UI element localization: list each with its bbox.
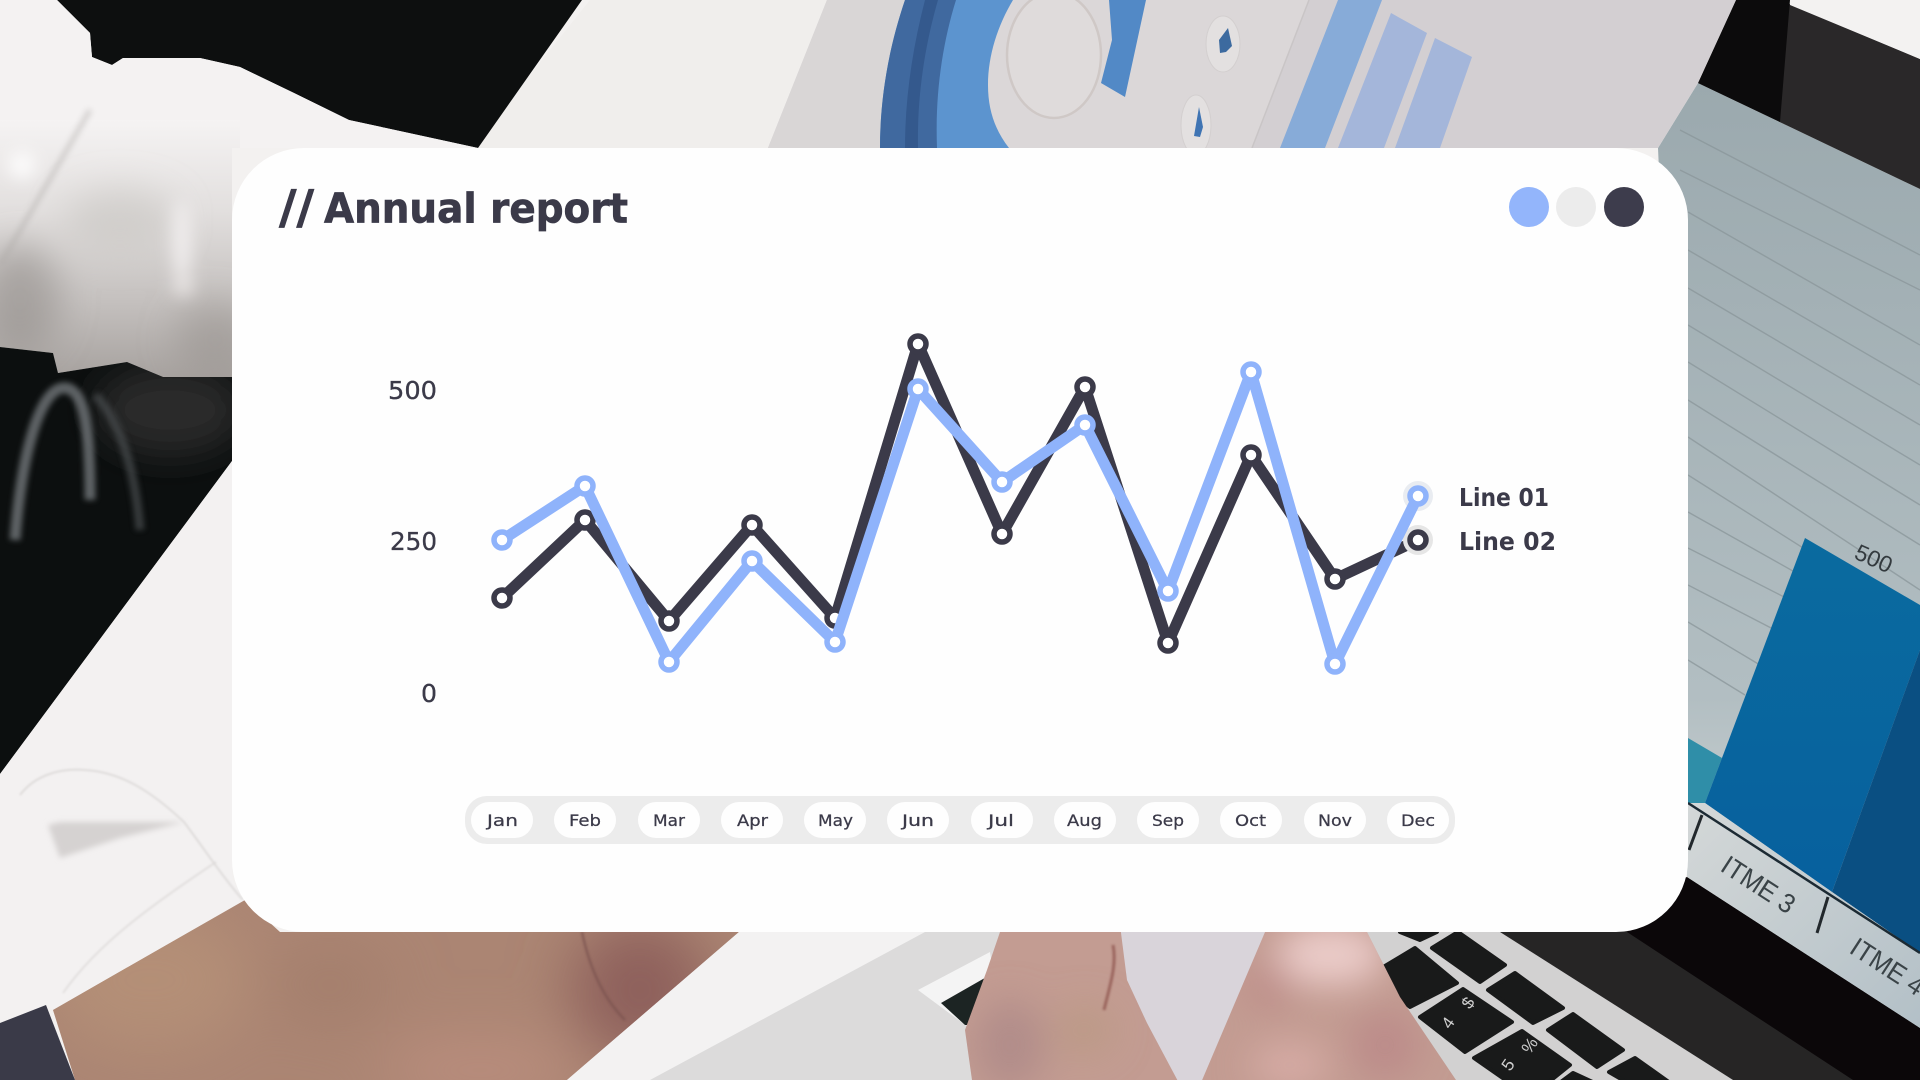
month axis track: Apr xyxy=(737,811,768,830)
month axis track: Jan xyxy=(486,811,518,830)
month axis track: Mar xyxy=(653,811,685,830)
photo: laptop keyboard deck xyxy=(1340,932,1733,1080)
month axis track: Dec xyxy=(1401,811,1435,830)
month axis track: May xyxy=(818,811,853,830)
photo: report bars xyxy=(1280,0,1472,148)
photo: screen bar chart xyxy=(1688,538,1920,953)
photo: right hand holding paper xyxy=(950,925,1470,1080)
month axis track: Sep xyxy=(1152,811,1184,830)
legend: line labels: Line 01 xyxy=(1459,483,1549,512)
photo: white desk top xyxy=(470,0,840,150)
photo: report icons xyxy=(1181,0,1309,155)
month axis track: Nov xyxy=(1318,811,1352,830)
legend: line labels: Line 02 xyxy=(1459,527,1556,556)
photo: keyboard keys xyxy=(1370,932,1680,1080)
y axis labels: 250 xyxy=(390,527,437,556)
photo: key labels: 4 xyxy=(1438,1014,1459,1032)
y axis labels: 500 xyxy=(388,376,437,405)
month axis track: Aug xyxy=(1067,811,1102,830)
photo: key labels: % xyxy=(1518,1034,1542,1057)
window dots xyxy=(1509,187,1644,227)
title: // xyxy=(279,180,314,234)
month axis track: Jun xyxy=(901,811,934,830)
photo: laptop dark hinge xyxy=(1500,877,1920,1080)
photo: screen label strip: ITME 3 xyxy=(1716,850,1801,920)
photo: black screen bezel xyxy=(1698,0,1920,189)
photo: lower desk xyxy=(567,932,1000,1080)
y axis labels: 0 xyxy=(421,679,437,708)
line 02 series xyxy=(494,336,1433,651)
photo: lower shirt xyxy=(0,461,245,1023)
photo: white shirt sleeve xyxy=(0,0,500,380)
photo: left hand xyxy=(40,890,760,1080)
month axis track: Jul xyxy=(987,811,1014,830)
photo: key labels xyxy=(1444,997,1538,1070)
photo: laptop screen xyxy=(1658,83,1920,960)
photo: screen label strip xyxy=(1687,539,1920,1028)
photo: key labels: $ xyxy=(1458,993,1479,1012)
month axis track: Feb xyxy=(569,811,601,830)
photo: dark leather chair xyxy=(0,340,245,780)
photo: report donut chart xyxy=(880,0,1146,148)
photo: report paper xyxy=(768,0,1736,148)
photo: dark cuff xyxy=(0,1005,75,1080)
title: Annual report xyxy=(324,184,628,232)
month axis track xyxy=(465,796,1455,844)
month axis track: Oct xyxy=(1235,811,1266,830)
line 01 series xyxy=(494,364,1433,672)
panel: chart card xyxy=(232,148,1688,932)
legend: line labels xyxy=(1459,483,1556,556)
photo: dark jacket behind sleeve xyxy=(57,0,582,148)
y axis labels xyxy=(388,376,437,708)
photo: key labels: 5 xyxy=(1498,1056,1519,1074)
photo: screen label strip: 500 xyxy=(1851,539,1897,578)
